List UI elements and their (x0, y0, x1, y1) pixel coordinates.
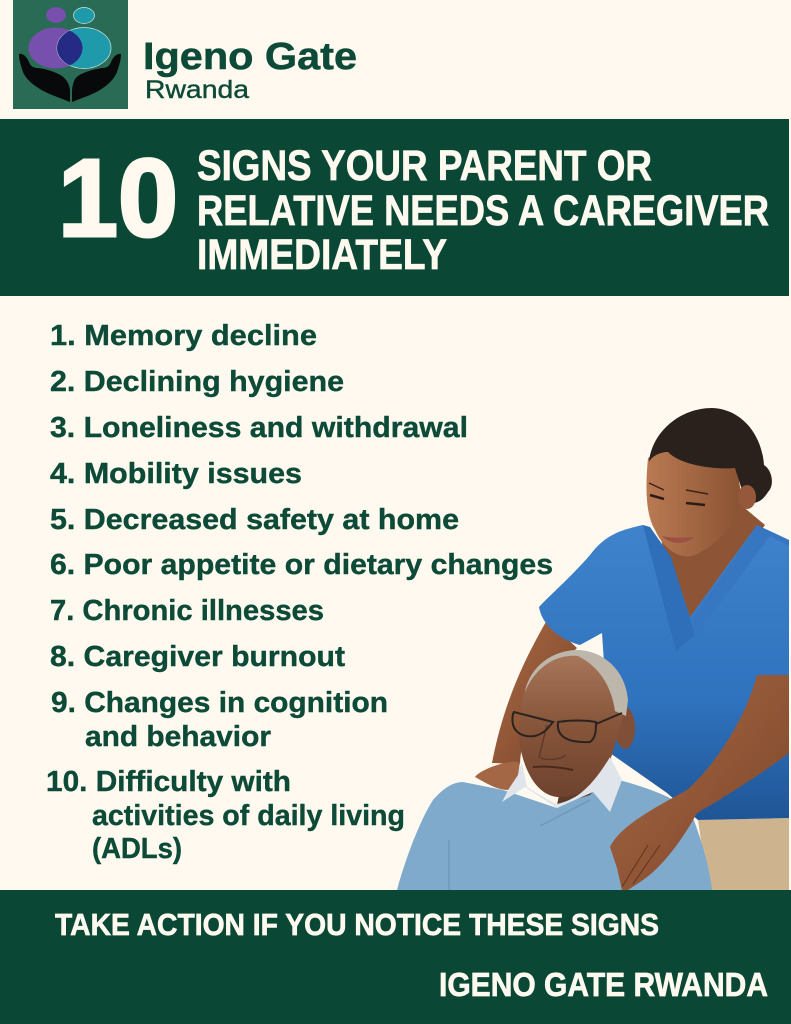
man's head (512, 650, 635, 805)
caregiver trousers (698, 818, 789, 890)
logo wordmark: Rwanda (145, 76, 249, 104)
mouth (533, 767, 573, 770)
illustration: caregiver and elderly man (397, 408, 789, 890)
caregiver hand on shoulder (475, 762, 520, 790)
logo (13, 0, 128, 109)
signs list (46, 320, 553, 865)
ear (738, 485, 756, 509)
title text: IMMEDIATELY (197, 231, 447, 279)
icon: caring hands (19, 54, 121, 102)
logo wordmark: Igeno Gate (143, 36, 357, 78)
caregiver left arm (492, 620, 577, 764)
sign 4: 4. Mobility issues (50, 458, 302, 490)
sign 7: 7. Chronic illnesses (50, 595, 324, 627)
caregiver scrubs (539, 525, 789, 820)
title banner (0, 119, 789, 296)
call to action: TAKE ACTION IF YOU NOTICE THESE SIGNS (55, 907, 659, 942)
caregiver neck and chest (660, 500, 765, 625)
sign 1: 1. Memory decline (50, 320, 317, 352)
man's sweater (397, 777, 712, 890)
man's collar (502, 757, 622, 812)
sign 5: 5. Decreased safety at home (50, 504, 459, 536)
sign 2: 2. Declining hygiene (50, 366, 344, 398)
hair (525, 650, 628, 716)
eyes and mouth (649, 483, 708, 494)
sign 9 (51, 687, 388, 753)
hair (649, 408, 772, 503)
sign 10: (ADLs) (92, 833, 182, 865)
scrubs collar (643, 525, 695, 651)
sign 6: 6. Poor appetite or dietary changes (50, 549, 553, 581)
footer banner (0, 890, 791, 1024)
neck (557, 745, 612, 805)
finger lines (622, 845, 660, 887)
logo wordmark (143, 36, 357, 104)
big number: 10 (58, 137, 178, 260)
sign 10 (46, 766, 405, 865)
sign 10: 10. Difficulty with (46, 766, 291, 798)
caregiver head (646, 408, 772, 556)
title text: SIGNS YOUR PARENT OR (197, 142, 652, 190)
sign 9: 9. Changes in cognition (51, 687, 388, 719)
title text (197, 142, 769, 279)
sign 3: 3. Loneliness and withdrawal (50, 412, 468, 444)
caregiver right arm and hand (610, 675, 789, 890)
organisation name: IGENO GATE RWANDA (439, 966, 768, 1003)
ear (615, 707, 635, 749)
sign 9: and behavior (85, 721, 271, 753)
nose shading (539, 725, 566, 759)
face (519, 652, 626, 797)
sweater placket and sleeve seam (449, 800, 590, 890)
glasses (512, 712, 622, 742)
sign 10: activities of daily living (92, 800, 405, 832)
icon: family figures (28, 7, 111, 68)
sign 8: 8. Caregiver burnout (50, 641, 345, 673)
